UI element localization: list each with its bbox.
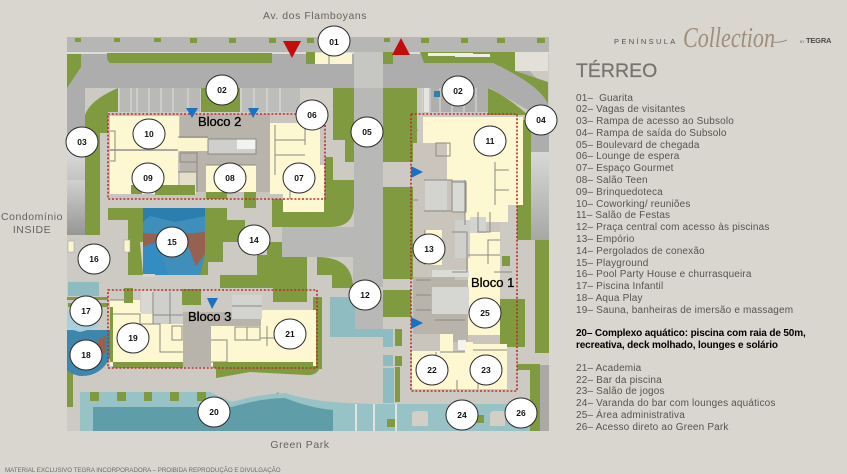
legend: numbered list of amenities: 11– Salão de Festas — [576, 210, 670, 221]
legend: numbered list of amenities: 25– Área administrativa — [576, 410, 685, 421]
plaza water channels — [68, 282, 394, 403]
marker numbers: 25 — [480, 308, 490, 318]
numbered location markers — [66, 26, 557, 430]
dotted outline: block 1 — [411, 114, 517, 391]
marker numbers: 16 — [89, 254, 99, 264]
park label: Green Park: Green Park — [270, 439, 330, 451]
block names: Bloco 2 — [198, 114, 241, 129]
legend: numbered list of amenities: 05– Boulevard de chegada — [576, 140, 700, 151]
marker numbers: 23 — [481, 365, 491, 375]
dotted outline: block 3 — [108, 290, 317, 368]
block 3 building — [110, 288, 316, 368]
legend: numbered list of amenities: 18– Aqua Play — [576, 293, 643, 304]
legend: numbered list of amenities: 26– Acesso direto ao Green Park — [576, 422, 729, 433]
marker numbers: 17 — [81, 306, 91, 316]
legend: numbered list of amenities: 10– Coworking/ reuniões — [576, 199, 691, 210]
legend: numbered list of amenities: 04– Rampa de saída do Subsolo — [576, 128, 727, 139]
marker numbers: 22 — [427, 365, 437, 375]
logo: Península Collection by Tegra: Collection — [683, 22, 775, 54]
street label: Av. dos Flamboyans: Av. dos Flamboyans — [263, 10, 367, 22]
marker numbers: 10 — [144, 129, 154, 139]
marker numbers: 09 — [143, 173, 153, 183]
logo: Península Collection by Tegra: TEGRA — [806, 36, 832, 45]
marker numbers: 02 — [453, 86, 463, 96]
marker numbers: 21 — [285, 329, 295, 339]
marker numbers: 05 — [362, 127, 372, 137]
legend: numbered list of amenities: 09– Brinquedoteca — [576, 187, 663, 198]
marker numbers: 04 — [536, 115, 546, 125]
legend: numbered list of amenities: 16– Pool Party House e churrasqueira — [576, 269, 752, 280]
street planters — [75, 38, 545, 43]
marker numbers: 06 — [307, 110, 317, 120]
children's pool and aqua play — [67, 312, 110, 376]
marker numbers: 11 — [486, 136, 495, 146]
legend: numbered list of amenities: recreativa, deck molhado, lounges e solário — [576, 340, 778, 351]
playground — [140, 208, 205, 277]
marker numbers — [77, 37, 546, 420]
legend: numbered list of amenities: 08– Salão Teen — [576, 175, 648, 186]
neighbour label: Condomínio INSIDE: INSIDE — [13, 224, 51, 236]
marker numbers: 26 — [516, 408, 526, 418]
legend: numbered list of amenities: 20– Complexo aquático: piscina com raia de 50m, — [576, 328, 806, 339]
legend: numbered list of amenities: 12– Praça central com acesso às piscinas — [576, 222, 770, 233]
marker numbers: 18 — [81, 350, 91, 360]
marker numbers: 24 — [457, 410, 467, 420]
legend: numbered list of amenities: 07– Espaço Gourmet — [576, 163, 674, 174]
block names — [188, 114, 514, 324]
logo: Península Collection by Tegra: PENÍNSULA — [614, 37, 678, 46]
heading: TÉRREO: TÉRREO — [576, 60, 657, 82]
legend: numbered list of amenities: 23– Salão de jogos — [576, 386, 665, 397]
legend: numbered list of amenities: 03– Rampa de acesso ao Subsolo — [576, 116, 734, 127]
icon: red entry and exit arrows — [283, 38, 410, 58]
icon: blue block entrance arrows — [186, 108, 423, 329]
block 2 building — [108, 114, 325, 212]
legend: numbered list of amenities: 14– Pergolados de conexão — [576, 246, 705, 257]
swimming pool 20 and deck — [80, 392, 530, 431]
marker numbers: 08 — [225, 173, 235, 183]
visitor parking — [119, 87, 488, 112]
marker numbers: 01 — [329, 37, 339, 47]
legend: numbered list of amenities: 01– Guarita — [576, 92, 633, 104]
footer disclaimer: MATERIAL EXCLUSIVO TEGRA INCORPORADORA – PROIBIDA REPRODUÇÃO E DIVULGAÇÃO — [5, 467, 281, 474]
marker numbers: 14 — [249, 235, 259, 245]
logo: Península Collection by Tegra: BY — [800, 40, 805, 44]
marker numbers: 20 — [209, 407, 219, 417]
pool party house 16 — [68, 240, 130, 252]
site ground — [67, 37, 549, 431]
legend: numbered list of amenities: 06– Lounge de espera — [576, 151, 680, 162]
block names: Bloco 1 — [471, 275, 514, 290]
guard house 01 — [306, 52, 490, 64]
marker numbers: 02 — [217, 85, 227, 95]
dotted outline: block 2 — [108, 114, 325, 199]
legend: numbered list of amenities: 24– Varanda do bar com lounges aquáticos — [576, 398, 776, 409]
legend: numbered list of amenities: 22– Bar da piscina — [576, 375, 662, 386]
legend: numbered list of amenities — [576, 92, 806, 433]
neighbour label: Condomínio INSIDE: Condomínio — [1, 211, 63, 223]
block names: Bloco 3 — [188, 309, 231, 324]
marker numbers: 15 — [167, 237, 177, 247]
landscaping: green areas — [67, 52, 549, 431]
marker numbers: 19 — [128, 333, 138, 343]
logo: Península Collection by Tegra — [614, 22, 832, 54]
ramps 03 and 04 — [67, 52, 549, 431]
legend: numbered list of amenities: 13– Empório — [576, 234, 635, 245]
legend: numbered list of amenities: 17– Piscina Infantil — [576, 281, 663, 292]
marker numbers: 07 — [294, 173, 304, 183]
marker numbers: 13 — [424, 244, 434, 254]
neighbour label: Condomínio INSIDE — [1, 211, 63, 236]
legend: numbered list of amenities: 15– Playground — [576, 258, 648, 269]
legend: numbered list of amenities: 19– Sauna, banheiras de imersão e massagem 21– Academia — [576, 305, 793, 374]
marker numbers: 12 — [360, 290, 370, 300]
marker numbers: 03 — [77, 137, 87, 147]
block 1 building — [412, 117, 523, 390]
legend: numbered list of amenities: 02– Vagas de visitantes — [576, 104, 685, 115]
